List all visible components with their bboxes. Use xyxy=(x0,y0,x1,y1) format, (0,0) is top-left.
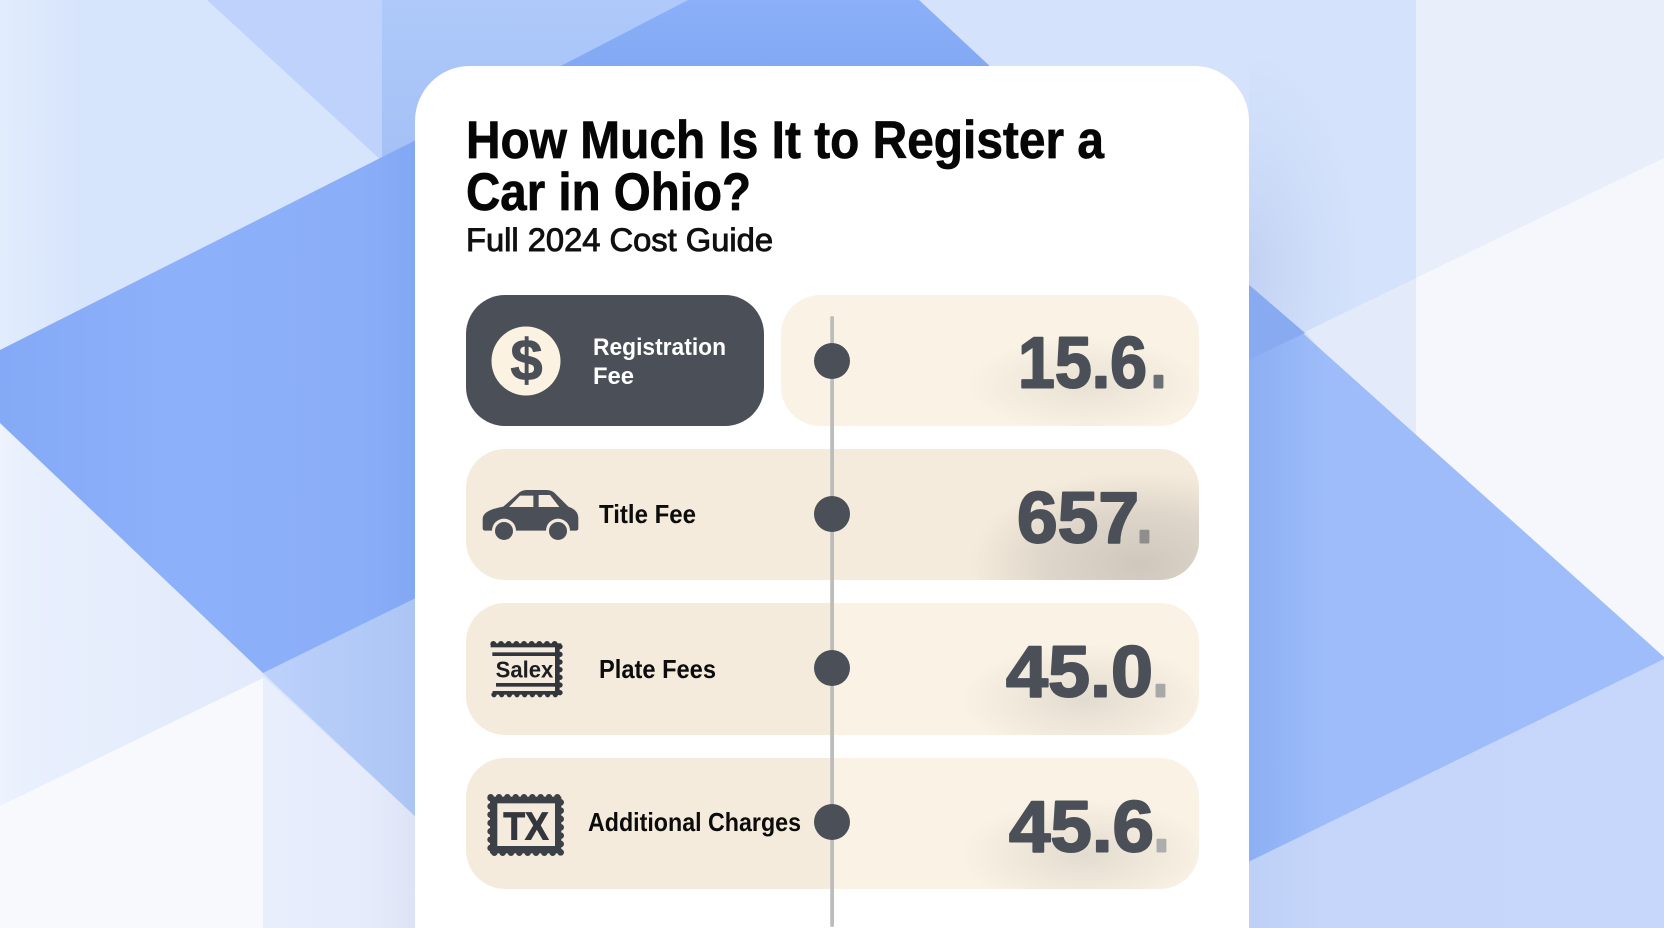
icon: tx stamp xyxy=(490,797,561,853)
value: 15.6.: 15.6 xyxy=(1018,324,1147,404)
label: registration fee: Fee xyxy=(593,363,634,390)
label: additional charges: Additional Charges xyxy=(588,807,801,837)
timeline with dots xyxy=(814,316,850,927)
value: 45.0.: . xyxy=(1153,632,1168,712)
row: registration fee xyxy=(466,295,1199,426)
row background: title fee xyxy=(466,449,1199,580)
icon: salex stamp xyxy=(491,643,561,695)
icon: tx stamp: TX xyxy=(503,805,549,848)
value: 45.6.: . xyxy=(1154,787,1169,867)
title: How Much Is It to Register a xyxy=(466,111,1104,170)
value: 45.0.: 45.0 xyxy=(1006,632,1153,712)
subtitle: Full 2024 Cost Guide xyxy=(466,222,773,258)
title: Car in Ohio? xyxy=(466,163,751,222)
white card xyxy=(415,66,1249,928)
value pill: 15.6 xyxy=(781,295,1199,426)
label pill: registration fee xyxy=(466,295,764,426)
value: 657.: . xyxy=(1137,478,1152,558)
row background: plate fees xyxy=(466,603,1199,735)
value: 15.6.: . xyxy=(1151,323,1166,403)
row: additional charges xyxy=(466,758,1199,889)
icon: salex stamp: Salex xyxy=(496,657,553,683)
label: registration fee: Registration xyxy=(593,334,726,361)
label: plate fees: Plate Fees xyxy=(599,654,716,684)
icon: dollar coin: $ xyxy=(510,328,543,393)
icon: car xyxy=(483,490,578,540)
row: title fee xyxy=(466,449,1199,580)
icon: dollar coin xyxy=(492,326,560,396)
value: 657.: 657 xyxy=(1017,478,1139,558)
value: 45.6.: 45.6 xyxy=(1009,788,1154,868)
label: title fee: Title Fee xyxy=(599,499,696,529)
row background: additional charges xyxy=(466,758,1199,889)
row: plate fees xyxy=(466,603,1199,735)
label: registration fee xyxy=(593,334,726,390)
title xyxy=(466,111,1104,222)
